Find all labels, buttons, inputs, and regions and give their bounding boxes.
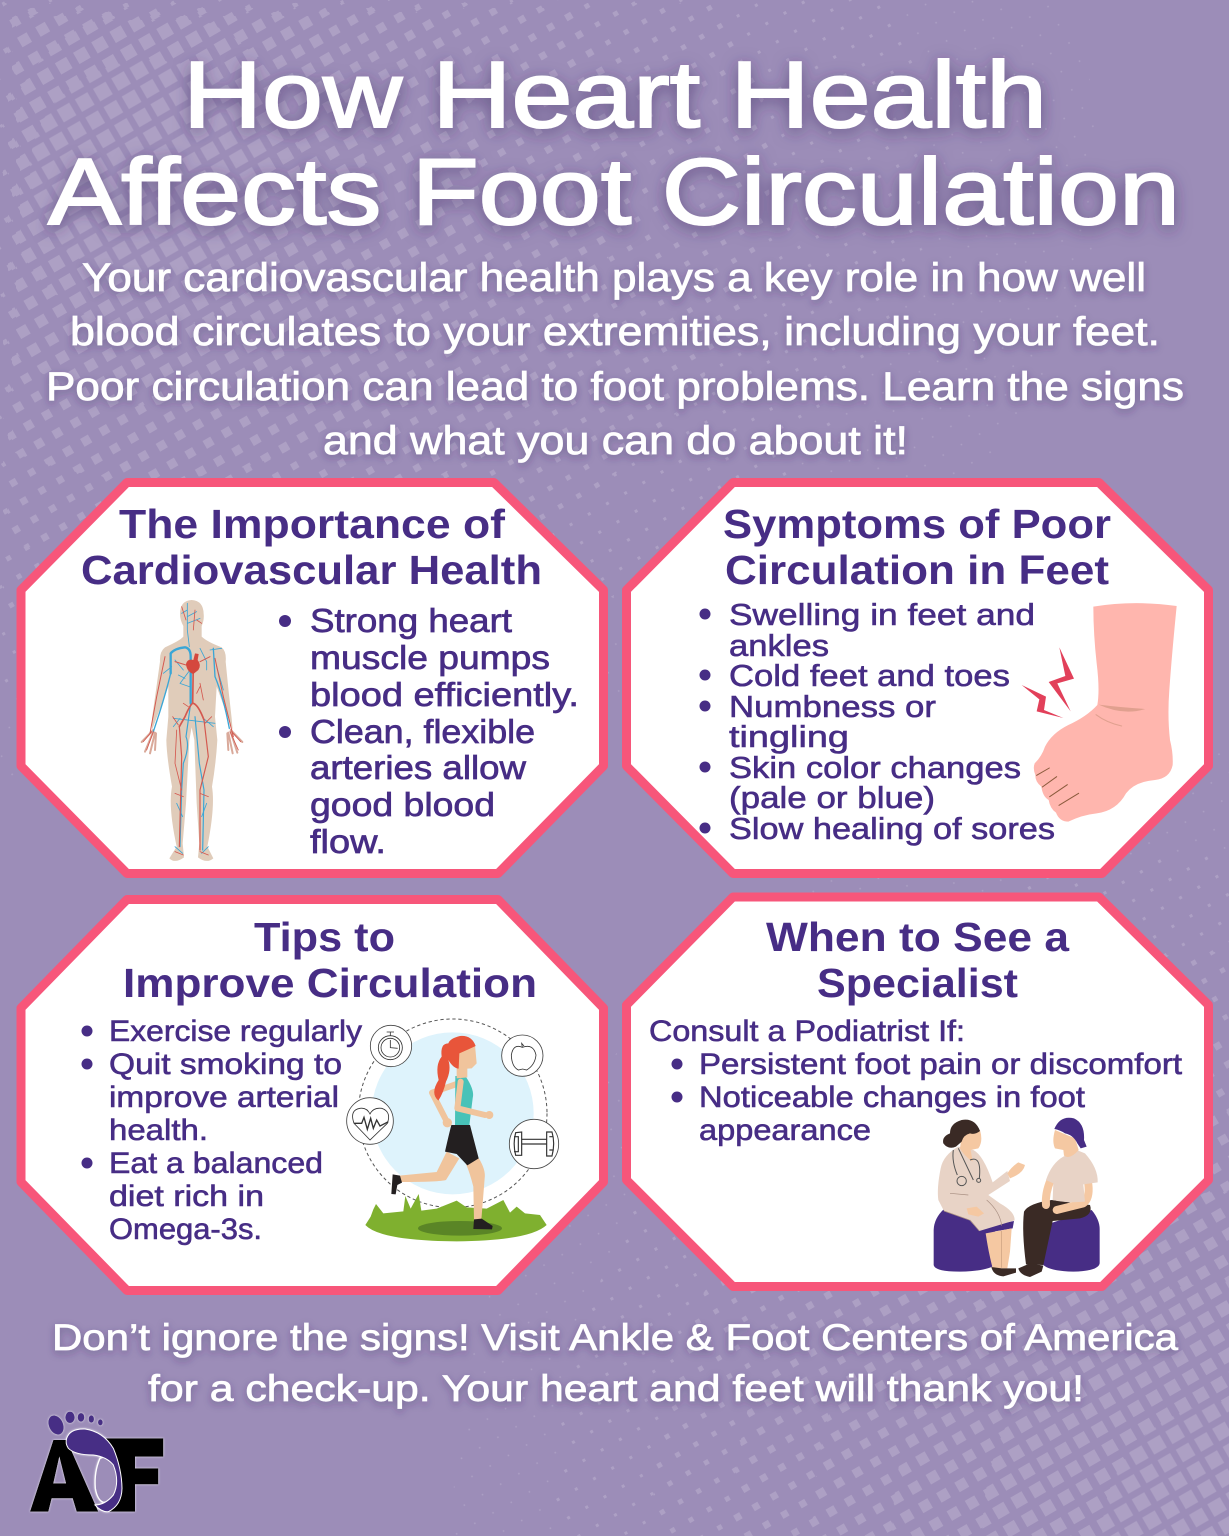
doctor coat — [938, 1147, 1015, 1231]
heading: tips: Tips to — [254, 914, 395, 960]
list: specialist — [649, 1015, 1183, 1147]
list: tips: Omega-3s. — [109, 1213, 262, 1246]
list: symptoms: Numbness or — [729, 689, 936, 724]
list: specialist: Persistent foot pain or discomfort — [699, 1048, 1183, 1081]
panel: when to see a specialist — [626, 897, 1208, 1286]
list: tips: Quit smoking to — [109, 1048, 342, 1081]
list: tips: Exercise regularly — [109, 1015, 362, 1048]
list: symptoms: Skin color changes — [729, 750, 1021, 785]
list: importance: blood efficiently. — [310, 676, 579, 713]
heading: tips — [123, 914, 537, 1006]
list: symptoms: tingling — [729, 719, 849, 754]
panel: tips to improve circulation — [21, 900, 604, 1290]
heading: specialist — [766, 914, 1070, 1006]
front leg — [466, 1158, 485, 1220]
stools — [934, 1209, 1100, 1272]
heading: symptoms — [723, 501, 1111, 593]
list: symptoms: Cold feet and toes — [729, 658, 1010, 693]
icon: human circulatory system — [142, 600, 242, 861]
list: tips: health. — [109, 1114, 208, 1147]
title: How Heart Health — [183, 42, 1047, 147]
closing call to action: Don’t ignore the signs! Visit Ankle & Foot Centers of America — [52, 1317, 1178, 1358]
heading: importance: Cardiovascular Health — [81, 547, 542, 593]
back arm — [432, 1084, 457, 1123]
list: symptoms: (pale or blue) — [729, 780, 935, 815]
list: symptoms: Slow healing of sores — [729, 811, 1055, 846]
heading: specialist: When to See a — [766, 914, 1070, 960]
list: importance: arteries allow — [310, 749, 526, 786]
list: importance — [279, 602, 579, 860]
list: importance: Clean, flexible — [310, 713, 535, 750]
intro text: blood circulates to your extremities, including your feet. — [70, 310, 1160, 354]
list: symptoms: ankles — [729, 628, 829, 663]
list: specialist: Noticeable changes in foot — [699, 1081, 1086, 1114]
closing call to action: for a check-up. Your heart and feet will thank you! — [148, 1368, 1084, 1409]
list: specialist: appearance — [699, 1114, 871, 1147]
list: importance: good blood — [310, 786, 495, 823]
intro text: Your cardiovascular health plays a key role in how well — [82, 256, 1146, 300]
list: specialist: Consult a Podiatrist If: — [649, 1015, 965, 1048]
back leg — [399, 1152, 459, 1182]
list: symptoms: Swelling in feet and — [729, 597, 1035, 632]
heading: specialist: Specialist — [817, 960, 1018, 1006]
heading: importance: The Importance of — [119, 501, 505, 547]
heading: symptoms: Symptoms of Poor — [723, 501, 1111, 547]
icon: swollen foot — [1022, 603, 1177, 822]
panel: symptoms of poor circulation — [626, 482, 1208, 874]
panel: importance of cardiovascular health — [21, 482, 604, 874]
intro text: Poor circulation can lead to foot problems. Learn the signs — [46, 365, 1184, 409]
intro text: and what you can do about it! — [323, 419, 908, 463]
list: tips: improve arterial — [109, 1081, 339, 1114]
patient shirt — [1046, 1150, 1098, 1202]
patient arms — [1046, 1180, 1051, 1205]
heading: symptoms: Circulation in Feet — [725, 547, 1109, 593]
logo: AF foot mark — [30, 1412, 163, 1512]
list: tips — [82, 1015, 362, 1246]
intro text — [46, 256, 1184, 463]
heading: importance — [81, 501, 542, 593]
list: tips: Eat a balanced — [109, 1147, 323, 1180]
closing call to action — [52, 1317, 1178, 1409]
list: tips: diet rich in — [109, 1180, 264, 1213]
list: importance: flow. — [310, 823, 386, 860]
title: Affects Foot Circulation — [48, 139, 1180, 244]
icon: runner with health icons — [347, 1019, 559, 1241]
title — [48, 42, 1180, 244]
list: importance: Strong heart — [310, 602, 512, 639]
heading: tips: Improve Circulation — [123, 960, 537, 1006]
patient trousers and shoes — [1023, 1200, 1091, 1265]
hands — [142, 730, 242, 753]
doctor legs and shoes — [986, 1228, 1012, 1268]
list: importance: muscle pumps — [310, 639, 550, 676]
icon: doctor and patient seated — [934, 1118, 1100, 1277]
list: symptoms — [700, 597, 1055, 846]
